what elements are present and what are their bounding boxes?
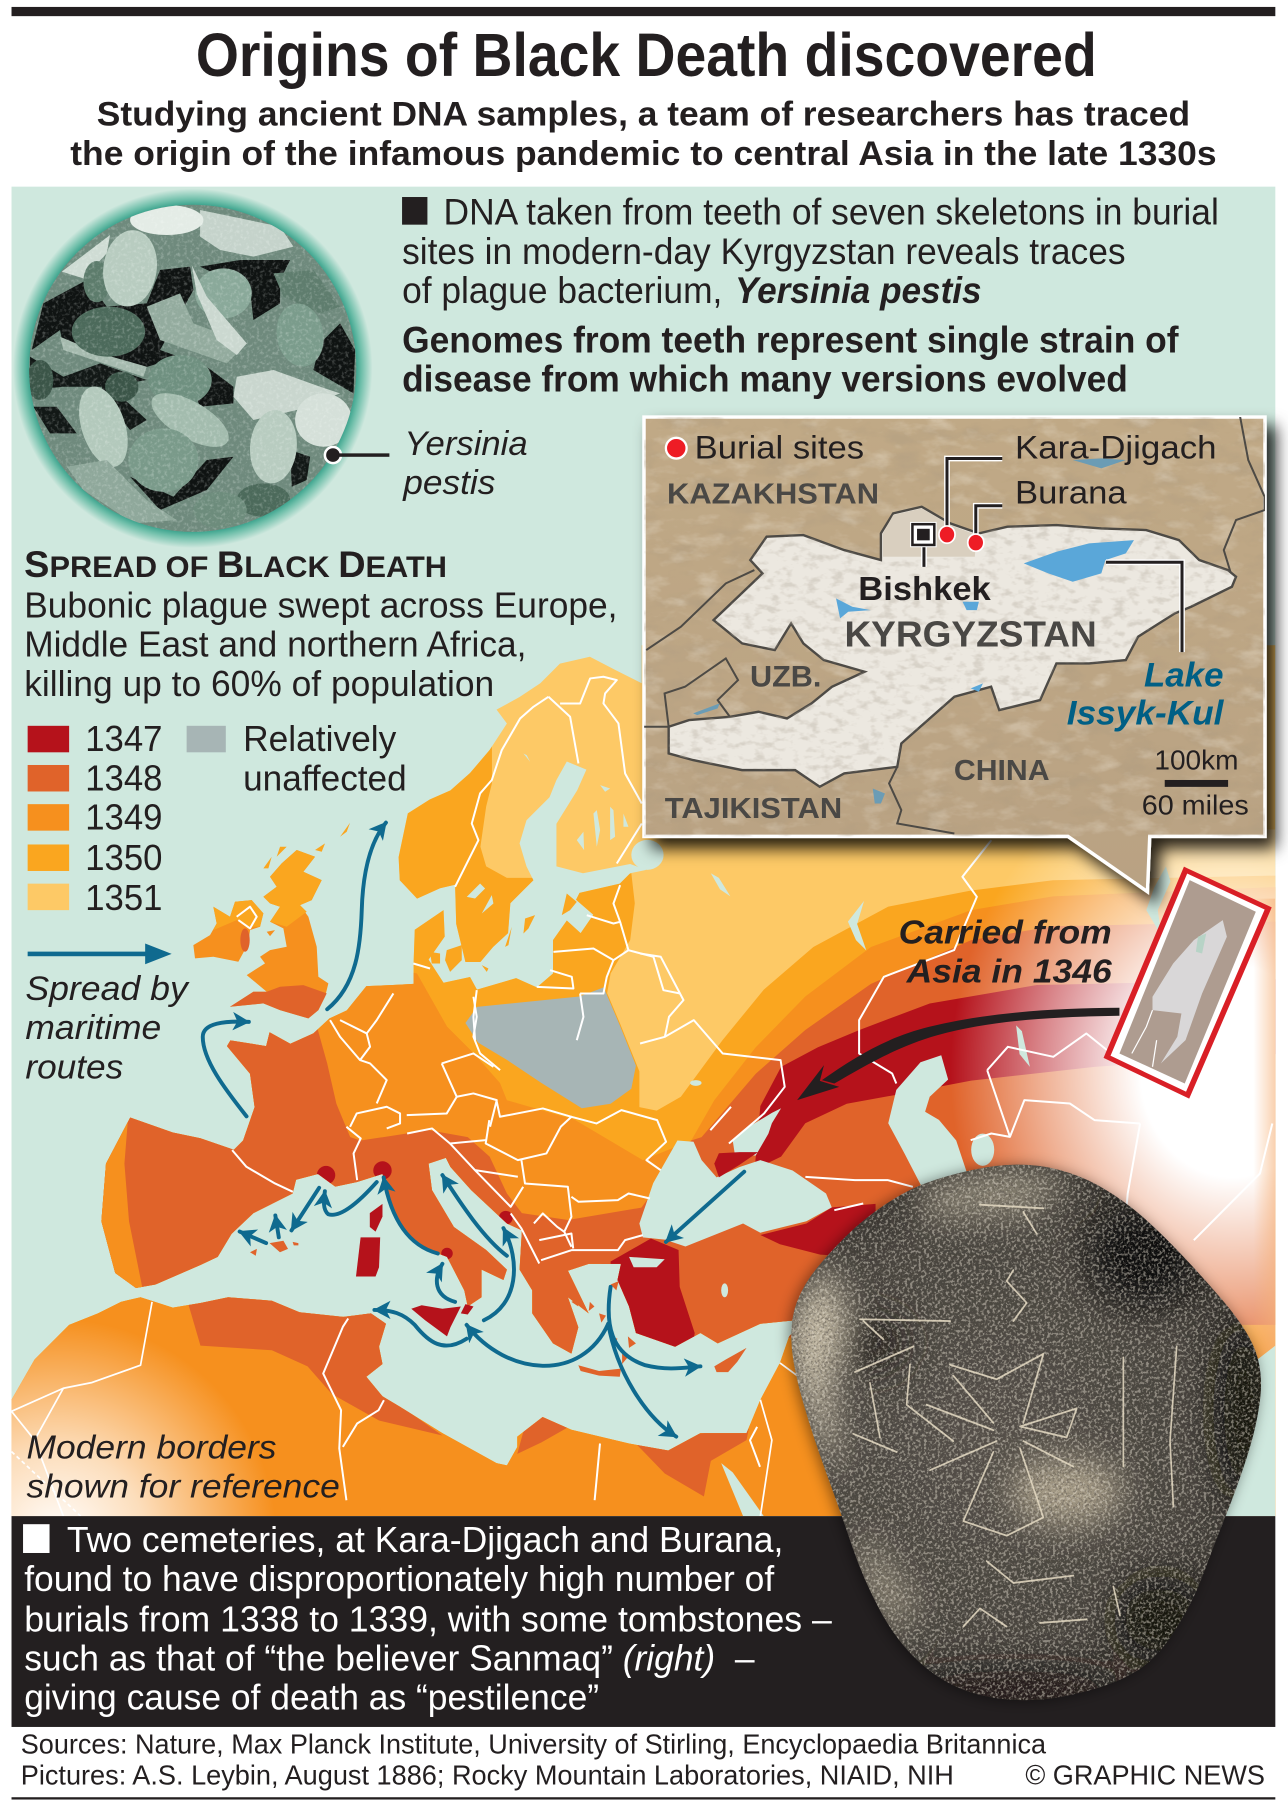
inset labels: Bishkek	[858, 571, 991, 608]
inset labels: Burial sites	[695, 430, 864, 466]
legend: maritime routes: Spread by	[25, 970, 191, 1008]
legend: years: 1351	[85, 878, 162, 918]
inset map: Kyrgyzstan	[644, 417, 1265, 892]
inset labels: UZB.	[750, 661, 821, 694]
legend: years: 1348	[85, 758, 162, 798]
panel: cemeteries text: Two cemeteries, at Kara-Djigach and Burana,	[67, 1520, 783, 1560]
text block: DNA findings: disease from which many versions evolved	[402, 359, 1128, 400]
seas and lakes	[467, 753, 1275, 1516]
inset labels: TAJIKISTAN	[665, 793, 842, 825]
legend: years: 1350	[85, 838, 162, 878]
label: carried from Asia: Asia in 1346	[906, 954, 1112, 991]
legend: years: 1349	[85, 797, 162, 837]
leader: Yersinia pestis label	[325, 447, 389, 463]
modern borders	[12, 1302, 806, 1516]
note: modern borders: Modern borders	[26, 1430, 277, 1467]
legend: years: unaffected	[243, 758, 407, 798]
legend: years	[28, 719, 407, 918]
legend: maritime routes	[25, 944, 191, 1086]
text block: DNA findings: sites in modern-day Kyrgyzstan reveals traces	[402, 231, 1126, 272]
panel: cemeteries text: found to have disproportionately high number of	[24, 1559, 774, 1599]
text block: DNA findings: DNA taken from teeth of seven skeletons in burial	[444, 192, 1219, 233]
sources and credit	[21, 1728, 1265, 1791]
inset labels: Burana	[1015, 474, 1127, 510]
map of Europe: spread of Black Death	[0, 611, 1288, 1544]
panel: green background	[12, 187, 1275, 1516]
panel: cemeteries text: burials from 1338 to 1339, with some tombstones –	[24, 1599, 832, 1639]
text block: DNA findings: Yersinia pestis	[735, 270, 982, 311]
inset labels: KYRGYZSTAN	[844, 614, 1097, 654]
text block: DNA findings	[402, 192, 1219, 400]
legend: years: 1347	[85, 719, 162, 759]
text block: DNA findings: Genomes from teeth represent single strain of	[402, 320, 1179, 361]
heading and text: spread of Black Death: Bubonic plague swept across Europe,	[24, 586, 618, 626]
inset labels: Issyk-Kul	[1067, 695, 1225, 733]
inset labels: Kara-Djigach	[1015, 430, 1217, 466]
caption: Yersinia pestis	[402, 425, 528, 502]
panel: cemeteries text	[12, 1516, 1275, 1727]
text block: DNA findings: of plague bacterium,	[402, 270, 722, 311]
inset labels: 60 miles	[1142, 790, 1249, 821]
note: modern borders: shown for reference	[26, 1469, 340, 1506]
inset labels: KAZAKHSTAN	[667, 478, 879, 510]
Kyrgyzstan territory	[644, 417, 1265, 833]
label: carried from Asia: Carried from	[899, 915, 1112, 952]
arrow: carried from Asia	[797, 1008, 1119, 1100]
heading and text: spread of Black Death: SPREAD OF BLACK DEATH	[24, 544, 447, 585]
panel: cemeteries text: giving cause of death as “pestilence”	[24, 1678, 599, 1718]
legend: years: Relatively	[243, 719, 396, 759]
subtitle: Studying ancient DNA samples, a team of researchers has traced	[97, 96, 1190, 134]
legend: maritime routes: maritime	[25, 1009, 161, 1047]
inset labels: 100km	[1154, 745, 1238, 776]
leaders and site markers	[910, 459, 1182, 652]
scale bar	[1165, 780, 1228, 787]
title: Origins of Black Death discovered	[196, 21, 1097, 89]
sources and credit: © GRAPHIC NEWS	[1025, 1760, 1265, 1791]
heading and text: spread of Black Death	[24, 544, 618, 704]
sources and credit: Pictures: A.S. Leybin, August 1886; Rocky Mountain Laboratories, NIAID, NIH	[21, 1760, 954, 1791]
inset labels: CHINA	[954, 755, 1050, 787]
subtitle	[70, 96, 1217, 173]
photo: tombstone	[772, 1158, 1279, 1722]
caption: Yersinia pestis: pestis	[402, 464, 495, 502]
top rule	[12, 7, 1275, 16]
locator map	[1107, 870, 1268, 1095]
inset labels	[665, 430, 1249, 825]
islands	[193, 823, 758, 1377]
panel: cemeteries text: such as that of “the believer Sanmaq” (right) –	[24, 1639, 755, 1679]
legend: maritime routes: routes	[25, 1048, 123, 1086]
label: carried from Asia	[899, 915, 1112, 991]
heading and text: spread of Black Death: killing up to 60% of population	[24, 664, 494, 704]
inset labels: Lake	[1144, 657, 1223, 695]
photo: Yersinia pestis bacteria	[13, 189, 372, 548]
sources and credit: Sources: Nature, Max Planck Institute, University of Stirling, Encyclopaedia Britannica	[21, 1728, 1047, 1759]
arrows: maritime routes	[203, 823, 744, 1437]
subtitle: the origin of the infamous pandemic to central Asia in the late 1330s	[70, 135, 1217, 173]
caption: Yersinia pestis: Yersinia	[404, 425, 528, 463]
heading and text: spread of Black Death: Middle East and northern Africa,	[24, 625, 526, 665]
note: modern borders	[26, 1430, 340, 1506]
